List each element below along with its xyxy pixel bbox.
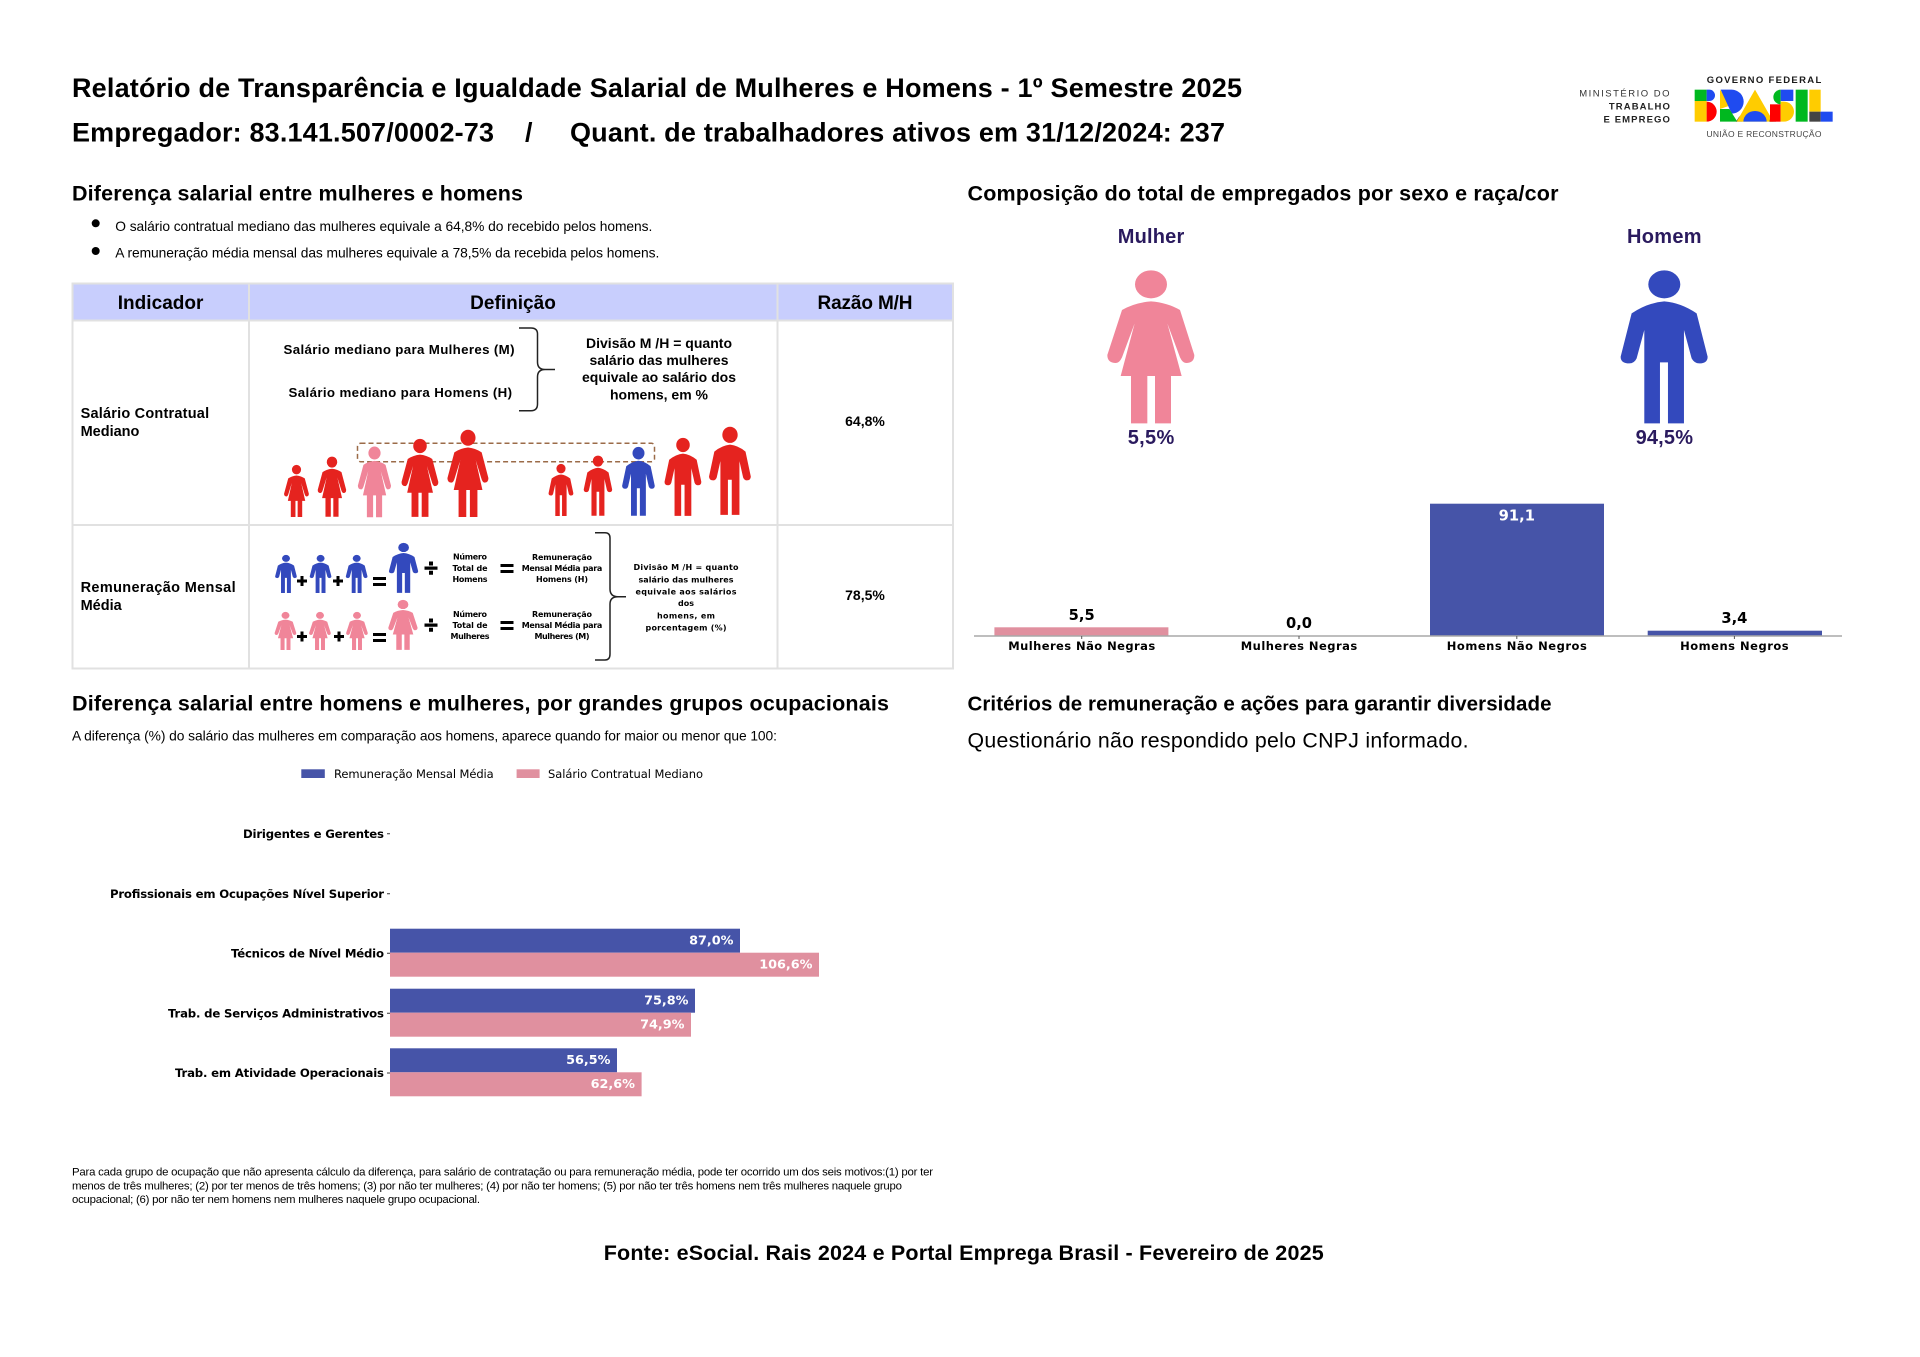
- logo: ministério e governo federal: [1579, 75, 1833, 139]
- table header: Definição: [470, 293, 556, 314]
- brace: [595, 533, 626, 660]
- footnote: ocupacional; (6) por não ter nem homens nem mulheres naquele grupo ocupacional.: [72, 1194, 480, 1206]
- bullet list: O salário contratual mediano das mulheres equivale a 64,8% do recebido pelos homens.: [115, 219, 652, 234]
- bars: serviços administrativos: [390, 989, 695, 1037]
- formula women: Total de: [452, 621, 488, 630]
- category labels: [110, 827, 384, 1080]
- definition text: homens, em %: [610, 386, 709, 402]
- bar values: 0,0: [1286, 615, 1312, 632]
- men figures: [549, 427, 751, 516]
- row: salário contratual mediano: Salário Contratual: [81, 406, 209, 422]
- bars: atividade operacional: 56,5%: [566, 1053, 611, 1068]
- formula men: Remuneração: [532, 553, 592, 562]
- bar chart: raça/cor: [974, 504, 1842, 653]
- bar values: 5,5: [1069, 607, 1095, 624]
- category labels: Técnicos de Nível Médio: [231, 946, 384, 960]
- row: remuneração mensal média: Remuneração Mensal: [81, 580, 236, 596]
- formula women: [275, 600, 602, 650]
- bar labels: Homens Não Negros: [1447, 639, 1587, 653]
- bars: técnicos: 106,6%: [759, 958, 813, 972]
- women figures: [284, 430, 488, 517]
- formula result text: dos: [678, 599, 694, 608]
- formula women: Número: [453, 610, 488, 619]
- formula men: [275, 543, 602, 593]
- row: remuneração mensal média: Média: [81, 598, 123, 614]
- row: salário contratual mediano: Mediano: [81, 424, 140, 440]
- bars: técnicos: [390, 929, 819, 977]
- value 78,5%: 78,5%: [845, 587, 885, 603]
- bars: serviços administrativos: 74,9%: [640, 1018, 685, 1032]
- panel: mulher: [1107, 226, 1194, 449]
- slogan: UNIÃO E RECONSTRUÇÃO: [1706, 129, 1822, 139]
- table header: Indicador: [118, 293, 204, 314]
- icon: woman: [1107, 270, 1194, 423]
- formula men: Homens (H): [536, 575, 588, 584]
- legend: Salário Contratual Mediano: [548, 767, 703, 781]
- formula women: Remuneração: [532, 610, 592, 619]
- brasil logotype: [1695, 90, 1833, 122]
- panel: mulher: 5,5%: [1128, 427, 1174, 449]
- title: Relatório de Transparência e Igualdade Salarial de Mulheres e Homens - 1º Semestre 2025: [72, 73, 1242, 103]
- row: remuneração mensal média: [81, 533, 885, 660]
- definition text: salário das mulheres: [590, 352, 729, 368]
- category labels: Profissionais em Ocupações Nível Superior: [110, 887, 384, 901]
- definition text: equivale ao salário dos: [582, 369, 736, 385]
- definition text: [284, 335, 736, 402]
- bars: técnicos: 87,0%: [689, 934, 734, 948]
- heading: critérios: Critérios de remuneração e ações para garantir diversidade: [968, 692, 1552, 716]
- bar values: 3,4: [1721, 610, 1747, 627]
- value 64,8%: 64,8%: [845, 413, 885, 429]
- bars: atividade operacional: 62,6%: [591, 1077, 635, 1092]
- questionnaire note: Questionário não respondido pelo CNPJ informado.: [968, 728, 1468, 752]
- title: Empregador: 83.141.507/0002-73: [72, 118, 494, 148]
- formula result text: [634, 563, 739, 633]
- ministry name: E EMPREGO: [1604, 114, 1671, 126]
- government label: GOVERNO FEDERAL: [1707, 75, 1821, 86]
- formula result text: salário das mulheres: [638, 576, 734, 585]
- legend: [301, 767, 703, 781]
- bar labels: Homens Negros: [1680, 639, 1789, 653]
- formula men: Homens: [452, 575, 488, 584]
- panel: homem: [1621, 226, 1708, 449]
- ministry name: [1579, 88, 1671, 126]
- bar values: 91,1: [1499, 508, 1535, 524]
- panel: homem: Homem: [1627, 226, 1702, 248]
- source: Fonte: eSocial. Rais 2024 e Portal Emprega Brasil - Fevereiro de 2025: [604, 1241, 1324, 1265]
- formula women: Mulheres (M): [534, 632, 590, 641]
- footnote: menos de três mulheres; (2) por ter menos de três homens; (3) por não ter mulheres; (4) por não ter homens; (5) por não ter três homens nem três mulheres naquele grupo: [72, 1181, 902, 1193]
- panel: mulher: Mulher: [1118, 226, 1185, 248]
- formula men: Mensal Média para: [522, 563, 602, 573]
- definition text: Salário mediano para Homens (H): [289, 385, 512, 400]
- formula men: Número: [453, 553, 488, 562]
- heading: composição: Composição do total de empregados por sexo e raça/cor: [968, 182, 1559, 206]
- category labels: Dirigentes e Gerentes: [243, 827, 384, 841]
- title: /: [525, 118, 533, 148]
- bullet list: [92, 219, 659, 260]
- ministry name: TRABALHO: [1609, 102, 1671, 112]
- icon: man: [1621, 270, 1708, 423]
- bar labels: Mulheres Negras: [1241, 639, 1357, 653]
- formula men: Total de: [452, 564, 488, 573]
- bar values: [1069, 508, 1747, 632]
- definition text: Divisão M /H = quanto: [586, 335, 732, 351]
- formula women: Mensal Média para: [522, 620, 602, 630]
- dashed median box: [358, 443, 654, 462]
- bar chart: grupos ocupacionais: [110, 827, 819, 1096]
- table: indicadores: [72, 283, 953, 669]
- bar labels: Mulheres Não Negras: [1008, 639, 1155, 653]
- brace: [519, 328, 555, 411]
- formula result text: homens, em: [657, 612, 715, 621]
- legend: Remuneração Mensal Média: [334, 767, 494, 781]
- category labels: Trab. em Atividade Operacionais: [175, 1066, 384, 1080]
- bullet list: A remuneração média mensal das mulheres equivale a 78,5% da recebida pelos homens.: [115, 246, 659, 260]
- formula result text: porcentagem (%): [646, 624, 726, 633]
- footnote: [72, 1166, 933, 1206]
- heading: grupos ocupacionais: Diferença salarial entre homens e mulheres, por grandes grupos ocupacionais: [72, 692, 889, 716]
- table header: [72, 283, 953, 320]
- title: [72, 73, 1242, 148]
- subtitle: A diferença (%) do salário das mulheres em comparação aos homens, aparece quando for maior ou menor que 100:: [72, 728, 777, 744]
- formula women: Mulheres: [450, 632, 490, 641]
- heading: diferença salarial: Diferença salarial entre mulheres e homens: [72, 182, 523, 206]
- formula result text: equivale aos salários: [636, 588, 737, 597]
- bar labels: [1008, 639, 1789, 653]
- title: Quant. de trabalhadores ativos em 31/12/2024: 237: [570, 118, 1225, 148]
- row: salário contratual mediano: [81, 328, 885, 517]
- footnote: Para cada grupo de ocupação que não apresenta cálculo da diferença, para salário de contratação ou para remuneração média, pode ter ocorrido um dos seis motivos:(1) por ter: [72, 1166, 933, 1178]
- bars: atividade operacional: [390, 1048, 642, 1096]
- bars: serviços administrativos: 75,8%: [644, 994, 689, 1008]
- panel: homem: 94,5%: [1636, 427, 1693, 449]
- formula result text: Divisão M /H = quanto: [634, 563, 739, 572]
- table header: Razão M/H: [818, 293, 912, 314]
- category labels: Trab. de Serviços Administrativos: [168, 1006, 384, 1020]
- definition text: Salário mediano para Mulheres (M): [284, 342, 514, 357]
- ministry name: MINISTÉRIO DO: [1579, 88, 1671, 100]
